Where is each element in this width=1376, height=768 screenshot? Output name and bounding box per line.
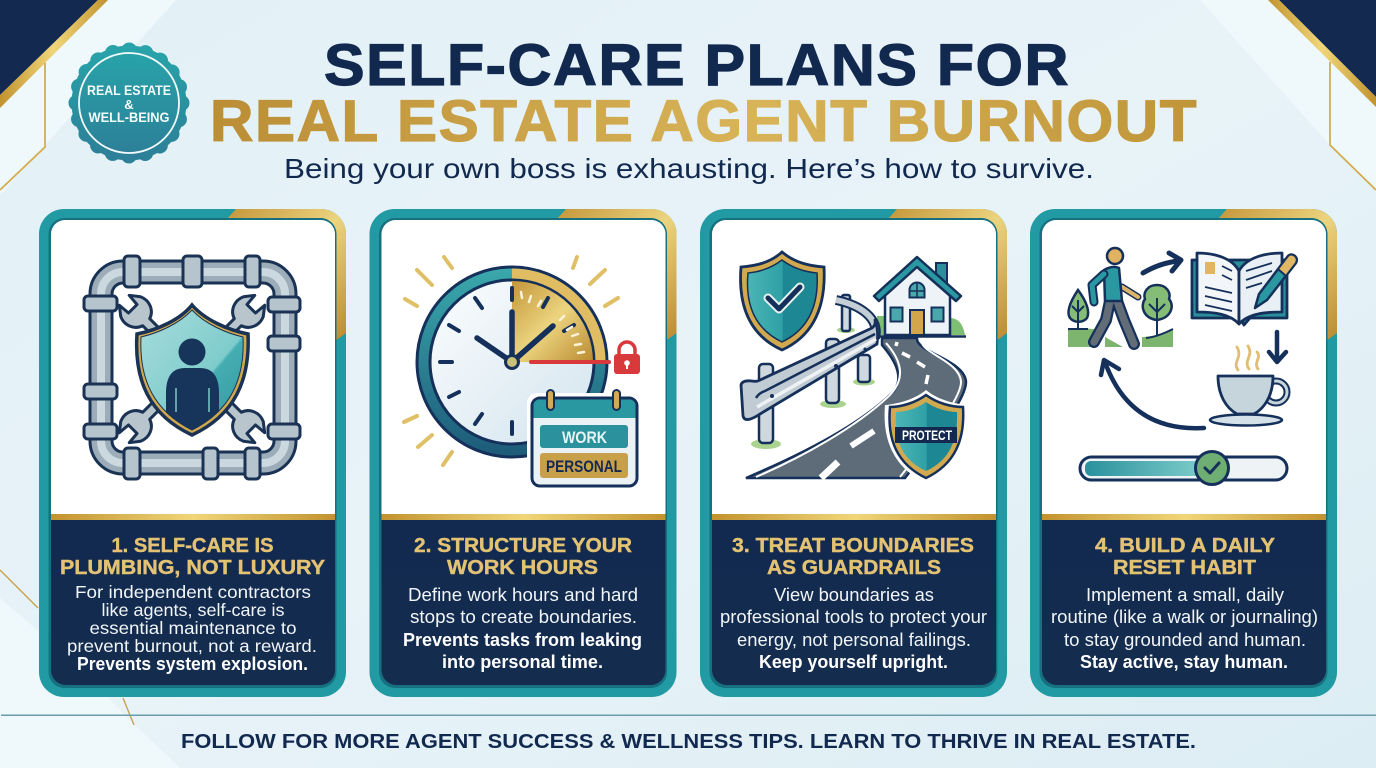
card 4 heading <box>1095 535 1276 579</box>
card 3 body <box>720 585 987 672</box>
red hard stop line <box>531 360 609 364</box>
title <box>210 33 1198 154</box>
clock hands <box>477 312 553 362</box>
progress slider <box>1080 452 1287 484</box>
card 2 heading: WORK HOURS <box>447 557 598 579</box>
card 1 heading: 1. SELF-CARE IS <box>112 535 274 557</box>
clock ticks <box>440 288 574 434</box>
card 3 body: energy, not personal failings. <box>737 630 971 650</box>
title: REAL ESTATE AGENT BURNOUT <box>210 89 1198 154</box>
card 1 body: prevent burnout, not a reward. <box>67 636 317 656</box>
icon: walking person in park <box>1068 248 1173 347</box>
card 3 heading <box>732 535 974 579</box>
clock ring <box>417 267 607 457</box>
card 4 body: to stay grounded and human. <box>1064 630 1306 650</box>
icon: pipes, wrenches and shield <box>84 256 300 479</box>
badge: real estate and well-being: REAL ESTATE <box>87 83 171 98</box>
card 4 heading: 4. BUILD A DAILY <box>1095 535 1276 557</box>
card 4 body: Implement a small, daily <box>1086 585 1284 605</box>
card 2 body: into personal time. <box>442 652 603 672</box>
subtitle: Being your own boss is exhausting. Here’s how to survive. <box>284 153 1094 184</box>
card 3 body: Keep yourself upright. <box>759 652 948 672</box>
card 4 body: routine (like a walk or journaling) <box>1051 607 1318 627</box>
card 3 body: professional tools to protect your <box>720 607 987 627</box>
icon: calendar <box>527 390 642 491</box>
road <box>746 338 966 478</box>
icon: road, guardrail, house and shields <box>741 252 968 483</box>
card 1 body: like agents, self-care is <box>102 600 285 620</box>
clock face <box>430 280 594 444</box>
sun rays <box>404 257 618 465</box>
badge: real estate and well-being: WELL-BEING <box>88 110 170 125</box>
corner decoration: top left <box>0 0 108 190</box>
badge: real estate and well-being <box>72 46 186 160</box>
pipe frame <box>101 272 285 463</box>
corner decoration: top right <box>1268 0 1376 190</box>
card 2 body: Define work hours and hard <box>408 585 638 605</box>
icon: clock with calendar and lock <box>404 257 642 491</box>
pipe collars <box>84 256 300 479</box>
gold wedge <box>512 281 593 362</box>
card 3 heading: 3. TREAT BOUNDARIES <box>732 535 974 557</box>
footer text: FOLLOW FOR MORE AGENT SUCCESS & WELLNESS TIPS. LEARN TO THRIVE IN REAL ESTATE. <box>181 731 1196 753</box>
card 4 body: Stay active, stay human. <box>1080 652 1288 672</box>
title: SELF-CARE PLANS FOR <box>324 33 1070 98</box>
panel: card 2 <box>370 209 676 697</box>
card 3 body: View boundaries as <box>774 585 934 605</box>
card 2 heading <box>414 535 633 579</box>
icon: check shield <box>741 252 824 350</box>
badge: real estate and well-being: & <box>124 97 134 112</box>
card 4 heading: RESET HABIT <box>1113 557 1256 579</box>
panel: card 4 <box>1030 209 1337 697</box>
card 1 body: For independent contractors <box>75 582 311 602</box>
icon: protect shield <box>885 390 968 483</box>
panel: card 3 <box>700 209 1007 697</box>
card 1 heading <box>60 535 326 579</box>
card 1 body <box>67 582 317 674</box>
card 1 body: essential maintenance to <box>90 618 296 638</box>
card 1 body: Prevents system explosion. <box>77 654 308 674</box>
card 2 body <box>403 585 642 672</box>
arrow: walk to journal <box>1143 253 1181 273</box>
shield with person <box>137 305 248 440</box>
card 1 heading: PLUMBING, NOT LUXURY <box>60 557 326 579</box>
icon: calendar: PERSONAL <box>546 457 622 476</box>
wrenches <box>113 289 271 449</box>
card 3 heading: AS GUARDRAILS <box>767 557 941 579</box>
card 2 body: Prevents tasks from leaking <box>403 630 642 650</box>
arrow: coffee to walk <box>1101 360 1204 428</box>
arrow: journal to coffee <box>1269 332 1286 362</box>
card 4 body <box>1051 585 1318 672</box>
panel: card 1 <box>39 209 346 697</box>
icon: lock <box>614 342 640 374</box>
icon: journal and pen <box>1192 253 1297 325</box>
icon: calendar: WORK <box>562 428 608 447</box>
icon: guardrail <box>741 295 878 449</box>
icon: house <box>874 257 966 336</box>
card 2 heading: 2. STRUCTURE YOUR <box>414 535 633 557</box>
icon: daily reset cycle <box>1068 248 1297 484</box>
icon: protect shield: PROTECT <box>902 427 952 443</box>
icon: coffee cup <box>1210 346 1287 426</box>
card 2 body: stops to create boundaries. <box>410 607 637 627</box>
footer divider <box>1 714 1376 716</box>
